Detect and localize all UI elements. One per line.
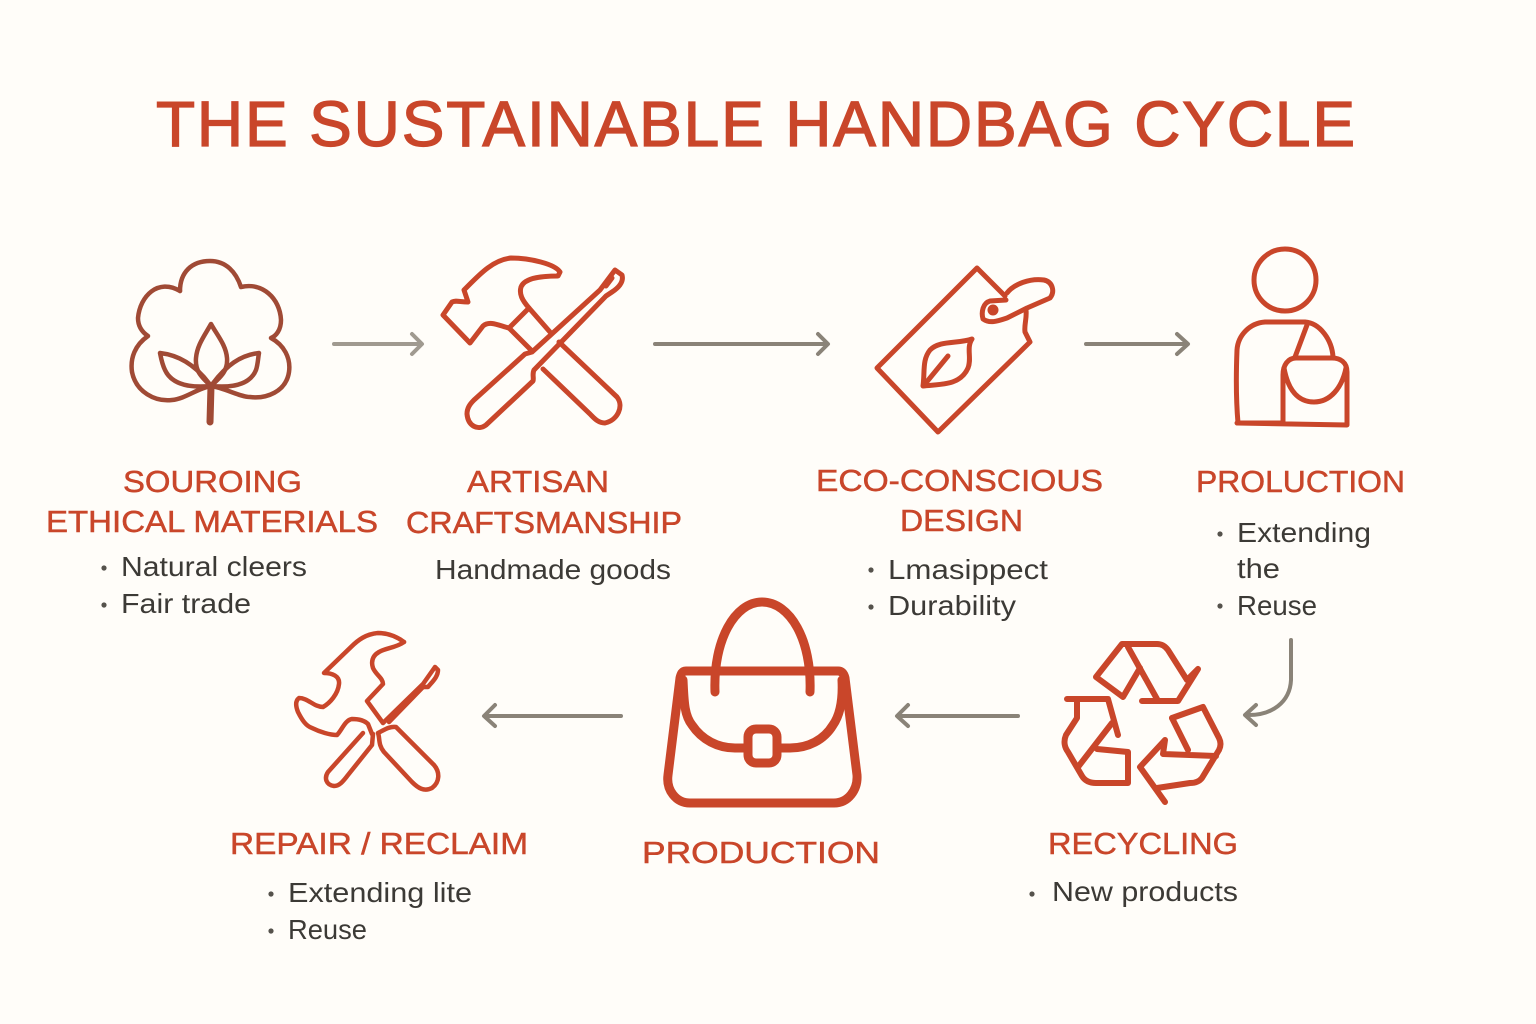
heading bbox=[816, 463, 1103, 538]
heading: PROLUCTION bbox=[1196, 464, 1405, 499]
bullet list: New products bbox=[1052, 876, 1238, 907]
icon: leaf tag bbox=[877, 268, 1053, 432]
body text: Handmade goods bbox=[435, 554, 671, 585]
panel: production handbag bbox=[642, 602, 880, 870]
arrow: curved production to recycling bbox=[1245, 640, 1291, 725]
heading: REPAIR / RECLAIM bbox=[230, 826, 528, 861]
icon: handbag bbox=[668, 602, 857, 803]
bullet list bbox=[1217, 517, 1371, 621]
bullet list bbox=[101, 551, 307, 619]
icon: small hammer and screwdriver bbox=[296, 633, 438, 790]
panel: recycling bbox=[1029, 644, 1238, 907]
heading: DESIGN bbox=[900, 503, 1023, 538]
arrow: recycling to handbag bbox=[897, 705, 1018, 726]
arrow: sourcing to artisan bbox=[334, 334, 422, 354]
bullet list: Reuse bbox=[1237, 590, 1317, 621]
panel: eco-conscious design bbox=[816, 268, 1103, 621]
panel: sourcing ethical materials bbox=[46, 261, 378, 619]
bullet list: Extending bbox=[1237, 517, 1371, 548]
heading: SOUROING bbox=[123, 464, 302, 499]
heading: CRAFTSMANSHIP bbox=[406, 505, 682, 540]
bullet list: Lmasippect bbox=[888, 554, 1048, 585]
bullet list: Durability bbox=[888, 590, 1016, 621]
bullet list bbox=[268, 877, 472, 945]
panel: production figure bbox=[1196, 249, 1405, 621]
arrow: design to production bbox=[1086, 334, 1188, 354]
panel: repair and reclaim bbox=[230, 633, 528, 945]
heading bbox=[406, 464, 682, 540]
icon: person with bag bbox=[1236, 249, 1347, 425]
bullet list: Extending lite bbox=[288, 877, 472, 908]
title: THE SUSTAINABLE HANDBAG CYCLE bbox=[156, 88, 1355, 160]
arrow: handbag to repair bbox=[484, 705, 621, 726]
arrow: artisan to design bbox=[655, 334, 828, 354]
bullet list bbox=[868, 554, 1048, 621]
heading: PRODUCTION bbox=[642, 835, 880, 870]
bullet list: Natural cleers bbox=[121, 551, 307, 582]
icon: cotton boll bbox=[132, 261, 289, 422]
bullet list: Fair trade bbox=[121, 588, 251, 619]
icon: hammer and screwdriver bbox=[443, 258, 622, 428]
heading: RECYCLING bbox=[1048, 826, 1238, 861]
heading bbox=[46, 464, 378, 539]
bullet list: Reuse bbox=[288, 914, 367, 945]
icon: recycling symbol bbox=[1065, 644, 1220, 802]
panel: artisan craftsmanship bbox=[406, 258, 682, 585]
heading: ECO-CONSCIOUS bbox=[816, 463, 1103, 498]
heading: ETHICAL MATERIALS bbox=[46, 504, 378, 539]
bullet list: the bbox=[1237, 553, 1280, 584]
heading: ARTISAN bbox=[467, 464, 609, 499]
